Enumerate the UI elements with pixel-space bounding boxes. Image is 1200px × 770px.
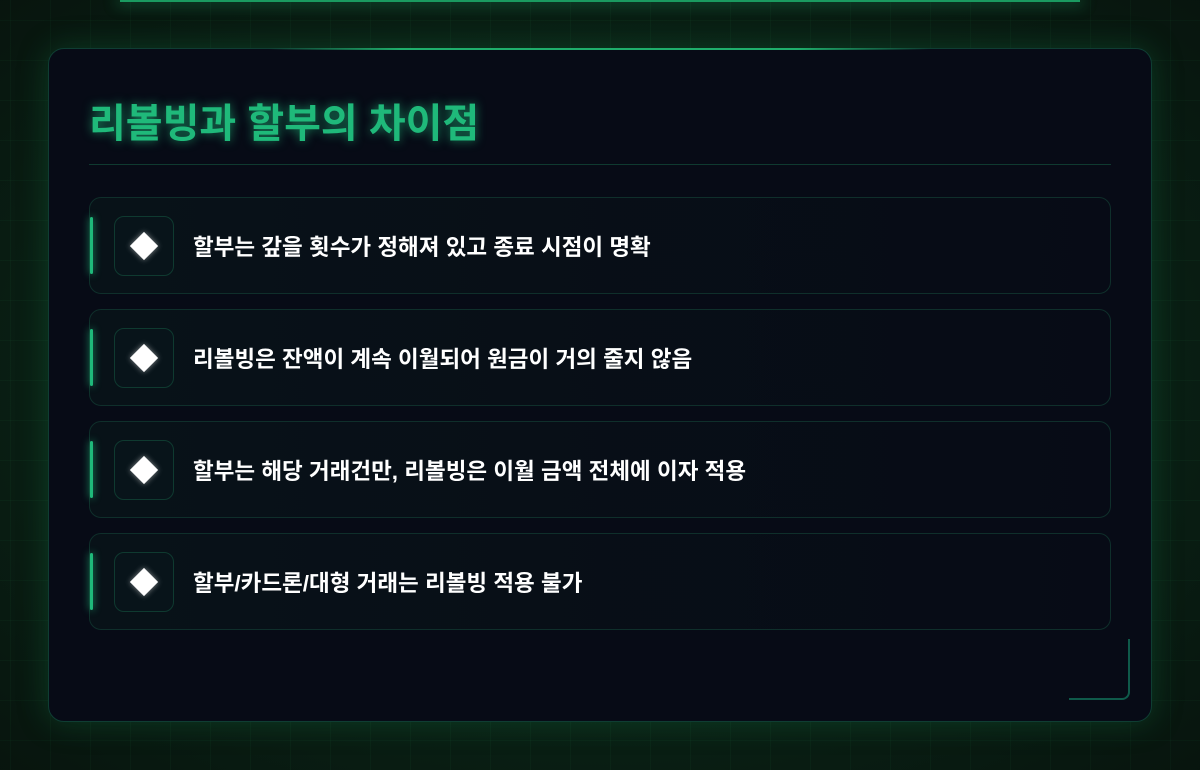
icon: diamond xyxy=(114,552,174,612)
text: item 3: 할부는 해당 거래건만, 리볼빙은 이월 금액 전체에 이자 적용 xyxy=(193,459,746,484)
item 2 xyxy=(89,309,1111,406)
icon: diamond xyxy=(114,440,174,500)
text: item 4: 할부/카드론/대형 거래는 리볼빙 적용 불가 xyxy=(193,571,582,596)
item 4 xyxy=(89,533,1111,630)
text: item 2: 리볼빙은 잔액이 계속 이월되어 원금이 거의 줄지 않음 xyxy=(193,347,692,372)
icon: diamond xyxy=(114,328,174,388)
icon: diamond xyxy=(114,216,174,276)
item 1 xyxy=(89,197,1111,294)
text: item 1: 할부는 갚을 횟수가 정해져 있고 종료 시점이 명확 xyxy=(193,235,651,260)
corner accent xyxy=(1069,639,1130,700)
item 3 xyxy=(89,421,1111,518)
title: 리볼빙과 할부의 차이점 xyxy=(89,102,479,146)
